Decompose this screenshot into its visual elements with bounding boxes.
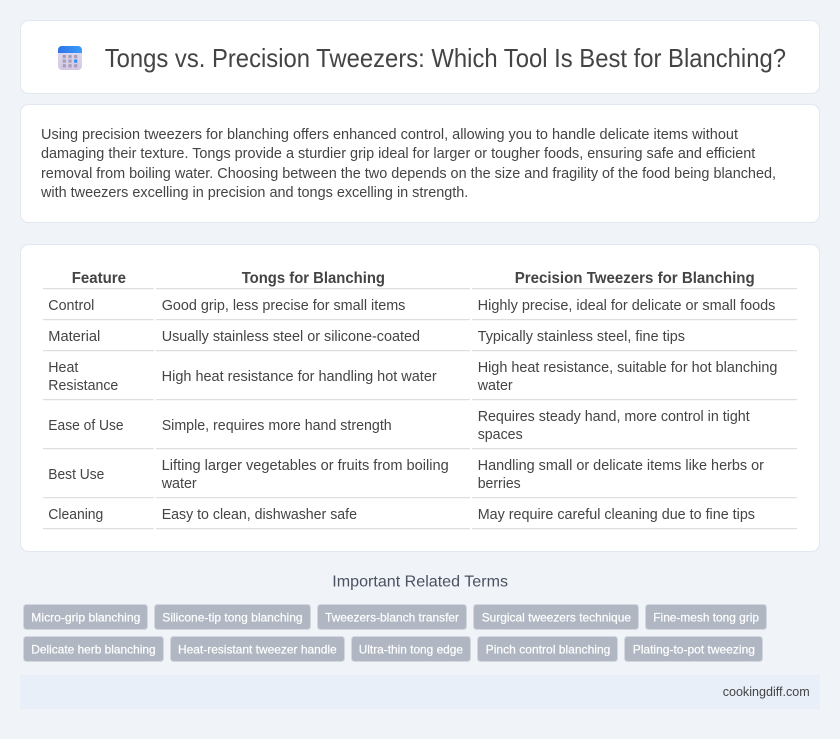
heading: related terms: Important Related Terms: [332, 574, 508, 591]
tags: related terms: Delicate herb blanching: [31, 642, 156, 656]
table row: cleaning: May require careful cleaning due to fine tips: [478, 507, 755, 523]
table row: control: Good grip, less precise for small items: [162, 298, 405, 314]
table row: heat resistance: [48, 360, 777, 394]
tags: related terms: Fine-mesh tong grip: [653, 610, 759, 624]
table row: best use: [48, 458, 764, 492]
table row: ease of use: Ease of Use: [48, 418, 124, 434]
tags: related terms: [24, 604, 766, 662]
table row: control: Highly precise, ideal for delicate or small foods: [478, 298, 775, 314]
table row: material: Typically stainless steel, fine tips: [478, 329, 685, 345]
tags: related terms: Ultra-thin tong edge: [359, 642, 463, 656]
table row: cleaning: Cleaning: [48, 507, 103, 523]
panel: title card: [20, 20, 820, 94]
table row: material: Usually stainless steel or silicone-coated: [162, 329, 420, 345]
table row: heat resistance: water: [477, 378, 513, 394]
tags: related terms: Pinch control blanching: [486, 642, 610, 656]
panel: introduction: [20, 104, 820, 222]
table row: material: [48, 329, 685, 345]
tags: related terms: Micro-grip blanching: [31, 610, 140, 624]
table header row: Feature: [72, 270, 126, 287]
text block: introduction paragraph: damaging their texture. Tongs provide a sturdier grip ideal for larger or tougher foods, ensuring safe and efficient: [41, 146, 755, 162]
table header row: Tongs for Blanching: [242, 270, 385, 287]
table row: heat resistance: Heat: [48, 360, 78, 376]
text block: introduction paragraph: with tweezers excelling in precision and tongs excelling in strength.: [40, 185, 468, 201]
table row: heat resistance: Resistance: [48, 378, 118, 394]
table row: heat resistance: High heat resistance, suitable for hot blanching: [478, 360, 777, 376]
table row: best use: Best Use: [48, 467, 104, 483]
panel: comparison table: [20, 244, 820, 552]
tags: related terms: Plating-to-pot tweezing: [633, 642, 755, 656]
table row: control: Control: [48, 298, 94, 314]
footer: cookingdiff.com: [723, 684, 810, 699]
title: Tongs vs. Precision Tweezers: Which Tool Is Best for Blanching?: [105, 45, 786, 73]
text block: introduction paragraph: removal from boiling water. Choosing between the two depends on the size and fragility of the food being blanched,: [41, 166, 776, 182]
table row: heat resistance: High heat resistance for handling hot water: [162, 369, 437, 385]
footer: [20, 675, 820, 709]
table row: ease of use: Simple, requires more hand strength: [162, 418, 392, 434]
icon: calendar: [58, 46, 82, 70]
table row: ease of use: spaces: [478, 427, 523, 443]
table row: best use: berries: [478, 476, 521, 492]
table row: best use: Lifting larger vegetables or fruits from boiling: [162, 458, 449, 474]
table header row: Precision Tweezers for Blanching: [515, 270, 755, 287]
table row: ease of use: [48, 409, 750, 443]
table row: ease of use: Requires steady hand, more control in tight: [478, 409, 750, 425]
table row: cleaning: Easy to clean, dishwasher safe: [162, 507, 357, 523]
table row: best use: water: [161, 476, 197, 492]
tags: related terms: Tweezers-blanch transfer: [325, 610, 459, 624]
tags: related terms: Heat-resistant tweezer handle: [178, 642, 337, 656]
table row: material: Material: [48, 329, 100, 345]
tags: related terms: Silicone-tip tong blanching: [162, 610, 303, 624]
table header row: [72, 270, 755, 287]
text block: introduction paragraph: Using precision tweezers for blanching offers enhanced control, allowing you to handle delicate items without: [41, 127, 738, 143]
tags: related terms: Surgical tweezers technique: [482, 610, 631, 624]
table row: best use: Handling small or delicate items like herbs or: [478, 458, 764, 474]
text block: introduction paragraph: [40, 127, 776, 201]
table row: cleaning: [48, 507, 755, 523]
table row: control: [48, 298, 775, 314]
